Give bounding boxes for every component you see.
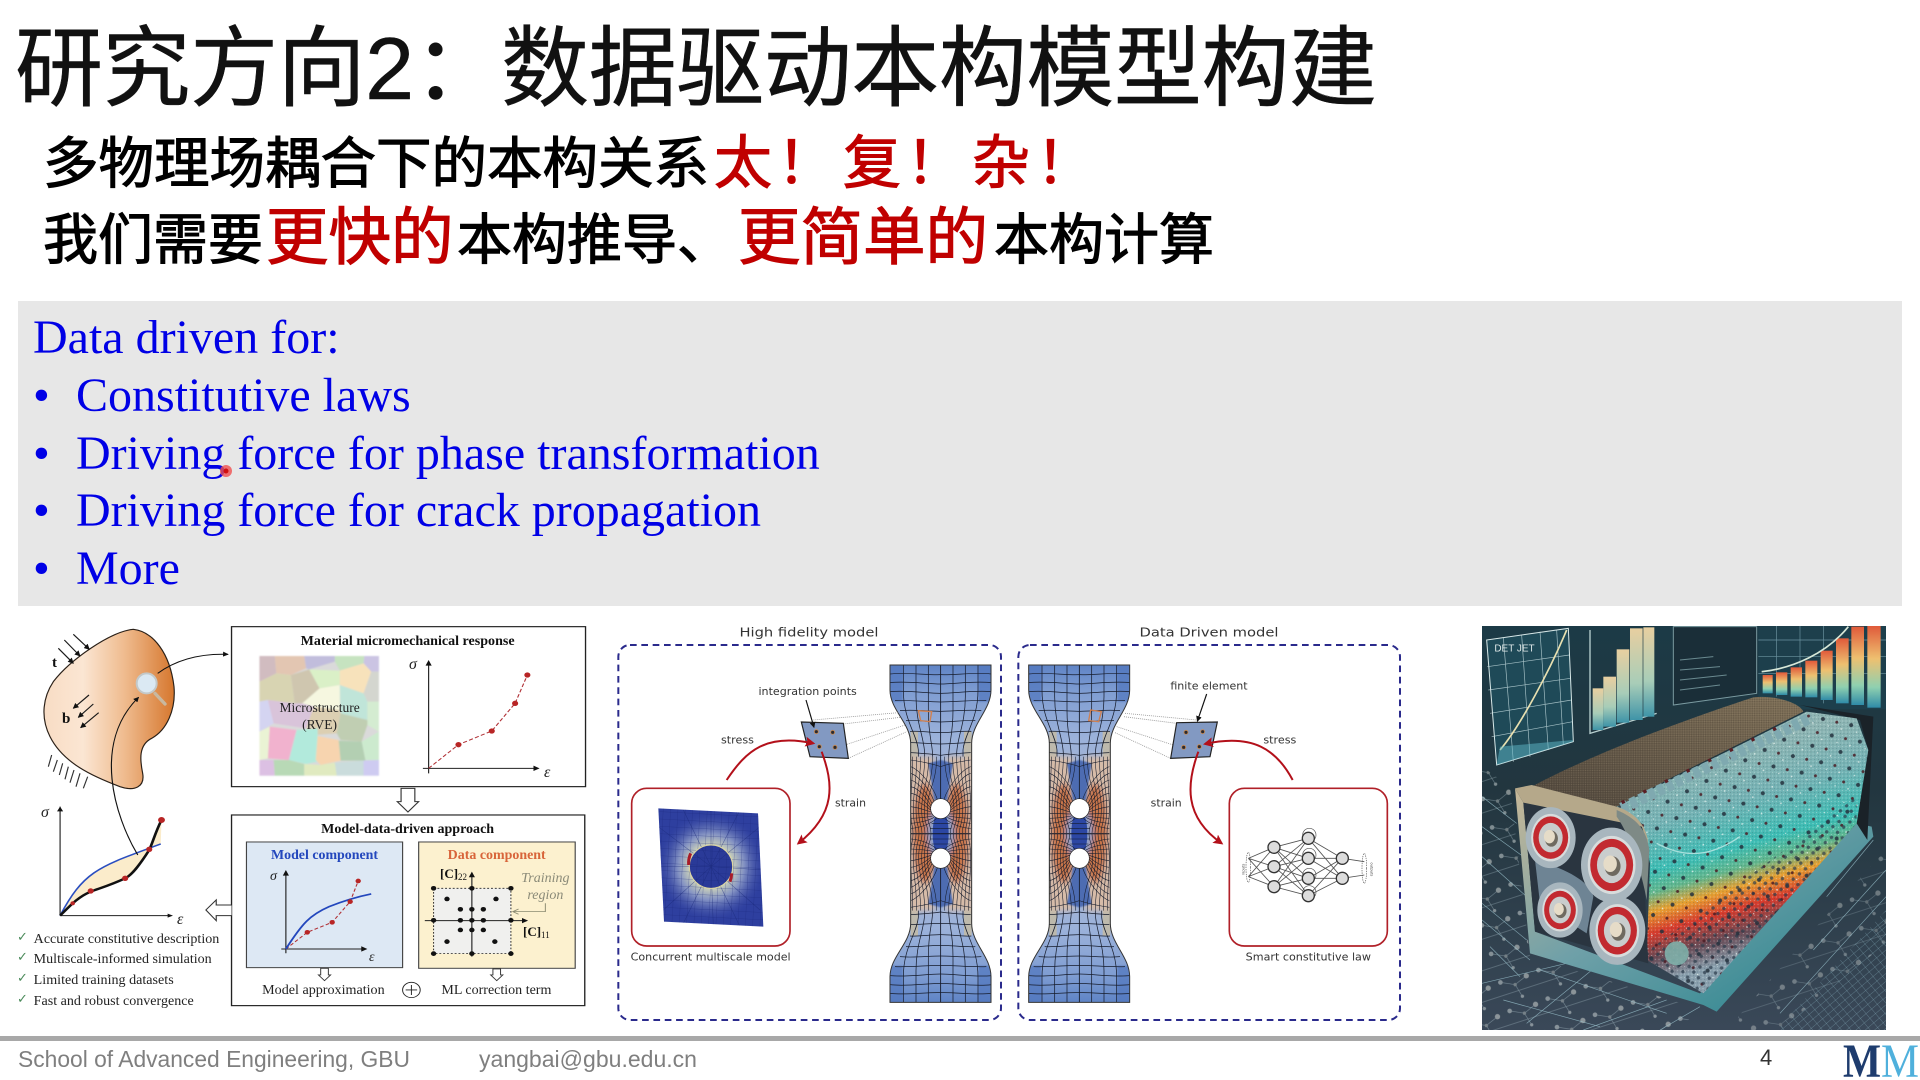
label: strain: strain xyxy=(835,797,866,810)
battery core with layered colours xyxy=(1617,712,1868,994)
chart: combined response xyxy=(57,807,173,918)
label: training region: region xyxy=(527,888,563,903)
load and axis labels: σ xyxy=(270,869,278,884)
plus sign xyxy=(403,982,420,998)
left grid chart xyxy=(1487,628,1573,765)
arrow: strain xyxy=(1190,752,1222,843)
label: concurrent multiscale model: Concurrent multiscale model xyxy=(631,952,791,964)
arrow: data to ML correction xyxy=(491,969,503,981)
illustration: battery cross-section with data charts xyxy=(1482,626,1886,1030)
checklist: ✓ xyxy=(17,992,28,1007)
footer: school: School of Advanced Engineering, GBU xyxy=(18,1046,410,1072)
label and arrow: integration points xyxy=(758,685,857,727)
panel: data driven list xyxy=(18,301,1902,606)
arrow: model to approximation xyxy=(318,968,331,981)
arrow: approach to combined chart xyxy=(206,900,232,921)
label: stress: stress xyxy=(1263,733,1297,746)
drawing layer xyxy=(57,627,586,1006)
specimen mesh xyxy=(890,665,991,1002)
label: ML correction term: ML correction term xyxy=(441,982,552,997)
highlighted element on specimen xyxy=(1089,710,1101,722)
dotted projection lines xyxy=(1115,713,1197,758)
label and arrow: integration points: integration points xyxy=(758,685,857,698)
checklist: ✓ xyxy=(17,950,28,965)
load and axis labels xyxy=(41,655,551,965)
dashed frame xyxy=(618,645,1001,1020)
bullet: more: More xyxy=(76,542,180,595)
load and axis labels: ε xyxy=(177,911,184,928)
label: model approximation: Model approximation xyxy=(262,982,385,997)
panel: data driven model xyxy=(1018,625,1400,1020)
microstructure RVE mosaic xyxy=(259,656,379,776)
arrow: response to approach xyxy=(397,788,419,812)
centre bar chart xyxy=(1590,627,1657,733)
right bar chart xyxy=(1758,626,1886,709)
bullet: phase transformation: Driving force for phase transformation xyxy=(76,427,820,480)
axis labels: C matrix: 22 xyxy=(458,872,467,882)
list heading: Data driven for: xyxy=(33,311,340,364)
neural network box: outputs xyxy=(1370,862,1374,876)
arrow: strain xyxy=(798,752,830,843)
load and axis labels: ε xyxy=(544,764,551,781)
label: material micromechanical response: Material micromechanical response xyxy=(301,633,515,648)
panel box: micromechanical response xyxy=(232,627,586,787)
panel: high fidelity model xyxy=(618,625,1001,1020)
panel: data component xyxy=(419,842,575,968)
title: 研究方向2：数据驱动本构模型构建 xyxy=(15,19,1377,118)
panel box: model-data-driven approach xyxy=(232,815,585,1006)
neural network box xyxy=(1229,788,1387,946)
subtitle line 1: 太 xyxy=(714,131,772,196)
label: microstructure RVE: Microstructure xyxy=(279,700,360,715)
subtitle line 2: 更简单的 xyxy=(738,203,988,273)
label: smart constitutive law: Smart constitutive law xyxy=(1246,952,1372,964)
neural network box: inputs xyxy=(1241,864,1245,875)
heading: Data Driven model xyxy=(1139,625,1278,640)
label: model-data-driven approach: Model-data-driven approach xyxy=(321,821,495,836)
subtitle line 1: 复 xyxy=(843,131,901,196)
multiscale model box xyxy=(632,788,790,946)
bullet: crack propagation: • xyxy=(33,484,50,537)
logo: MM xyxy=(1843,1035,1919,1080)
circuit-board floor xyxy=(1482,767,1886,1030)
bullet: more: • xyxy=(33,542,50,595)
subtitle line 2: 本构推导、 xyxy=(457,209,732,271)
load and axis labels: t xyxy=(52,655,57,671)
axis labels: C matrix: [C] xyxy=(523,924,541,939)
checklist: Multiscale-informed simulation xyxy=(34,951,212,966)
icon: loaded body xyxy=(44,629,174,789)
label: data component: Data component xyxy=(448,847,546,862)
subtitle line 1: ！ xyxy=(1036,131,1094,196)
checklist: ✓ xyxy=(17,930,28,945)
label: microstructure RVE: (RVE) xyxy=(302,717,337,732)
bullet: phase transformation: • xyxy=(33,427,50,480)
base plate xyxy=(1515,788,1873,1012)
subtitle line 2: 本构计算 xyxy=(994,209,1214,271)
dark back plate xyxy=(1800,705,1873,840)
figure: model-data-driven framework xyxy=(17,627,586,1008)
axis labels: C matrix xyxy=(440,866,550,940)
label and arrow: finite element xyxy=(1170,679,1248,721)
left grid chart: DET JET xyxy=(1494,644,1535,655)
specimen mesh xyxy=(1029,665,1130,1002)
checklist xyxy=(17,930,220,1008)
label: model component: Model component xyxy=(271,847,379,862)
checklist: Accurate constitutive description xyxy=(34,931,220,946)
textured top cover xyxy=(1532,697,1803,807)
arrow: stress xyxy=(1205,741,1293,780)
subtitle line 1: 多物理场耦合下的本构关系 xyxy=(43,133,709,195)
highlighted element on specimen xyxy=(918,711,932,722)
subtitle line 1: ！ xyxy=(777,131,835,196)
bead row along the top xyxy=(1622,717,1812,808)
finite element xyxy=(1171,722,1217,758)
dashed frame xyxy=(1018,645,1400,1020)
bullet: crack propagation: Driving force for crack propagation xyxy=(76,484,761,537)
material point element xyxy=(801,722,848,758)
subtitle line 1: 杂 xyxy=(972,131,1030,196)
subtitle line 2: 我们需要 xyxy=(43,209,263,271)
axis labels: C matrix: 11 xyxy=(541,930,550,940)
bullet: constitutive laws: • xyxy=(33,369,50,422)
label: strain: strain xyxy=(1151,797,1182,810)
laser pointer dot xyxy=(220,465,232,477)
load and axis labels: b xyxy=(62,711,70,727)
front casing with four cells xyxy=(1515,785,1649,965)
checklist: Fast and robust convergence xyxy=(34,993,194,1008)
footer rule xyxy=(0,1036,1920,1041)
bullet: constitutive laws: Constitutive laws xyxy=(76,369,411,422)
arrow: body to micromechanical response xyxy=(158,654,228,673)
checklist: Limited training datasets xyxy=(34,972,174,987)
label: stress: stress xyxy=(721,733,754,746)
label and arrow: finite element: finite element xyxy=(1170,679,1248,692)
arrow: curve to material point xyxy=(111,697,139,855)
arrow: stress xyxy=(727,740,813,780)
footer: email: yangbai@gbu.edu.cn xyxy=(479,1046,697,1072)
load and axis labels: σ xyxy=(409,656,418,673)
checklist: ✓ xyxy=(17,971,28,986)
heading: High fidelity model xyxy=(739,625,878,640)
load and axis labels: ε xyxy=(369,950,375,965)
subtitle line 1: ！ xyxy=(906,131,964,196)
label: training region: Training xyxy=(521,871,570,886)
subtitle line 2: 更快的 xyxy=(266,203,454,273)
axis labels: C matrix: [C] xyxy=(440,866,458,881)
panel: model component xyxy=(246,842,403,968)
page number: 4 xyxy=(1760,1045,1772,1070)
load and axis labels: σ xyxy=(41,804,50,821)
text panel in the background xyxy=(1673,627,1757,705)
chart: micromechanical data points xyxy=(423,660,540,773)
dotted projection lines xyxy=(813,713,907,758)
